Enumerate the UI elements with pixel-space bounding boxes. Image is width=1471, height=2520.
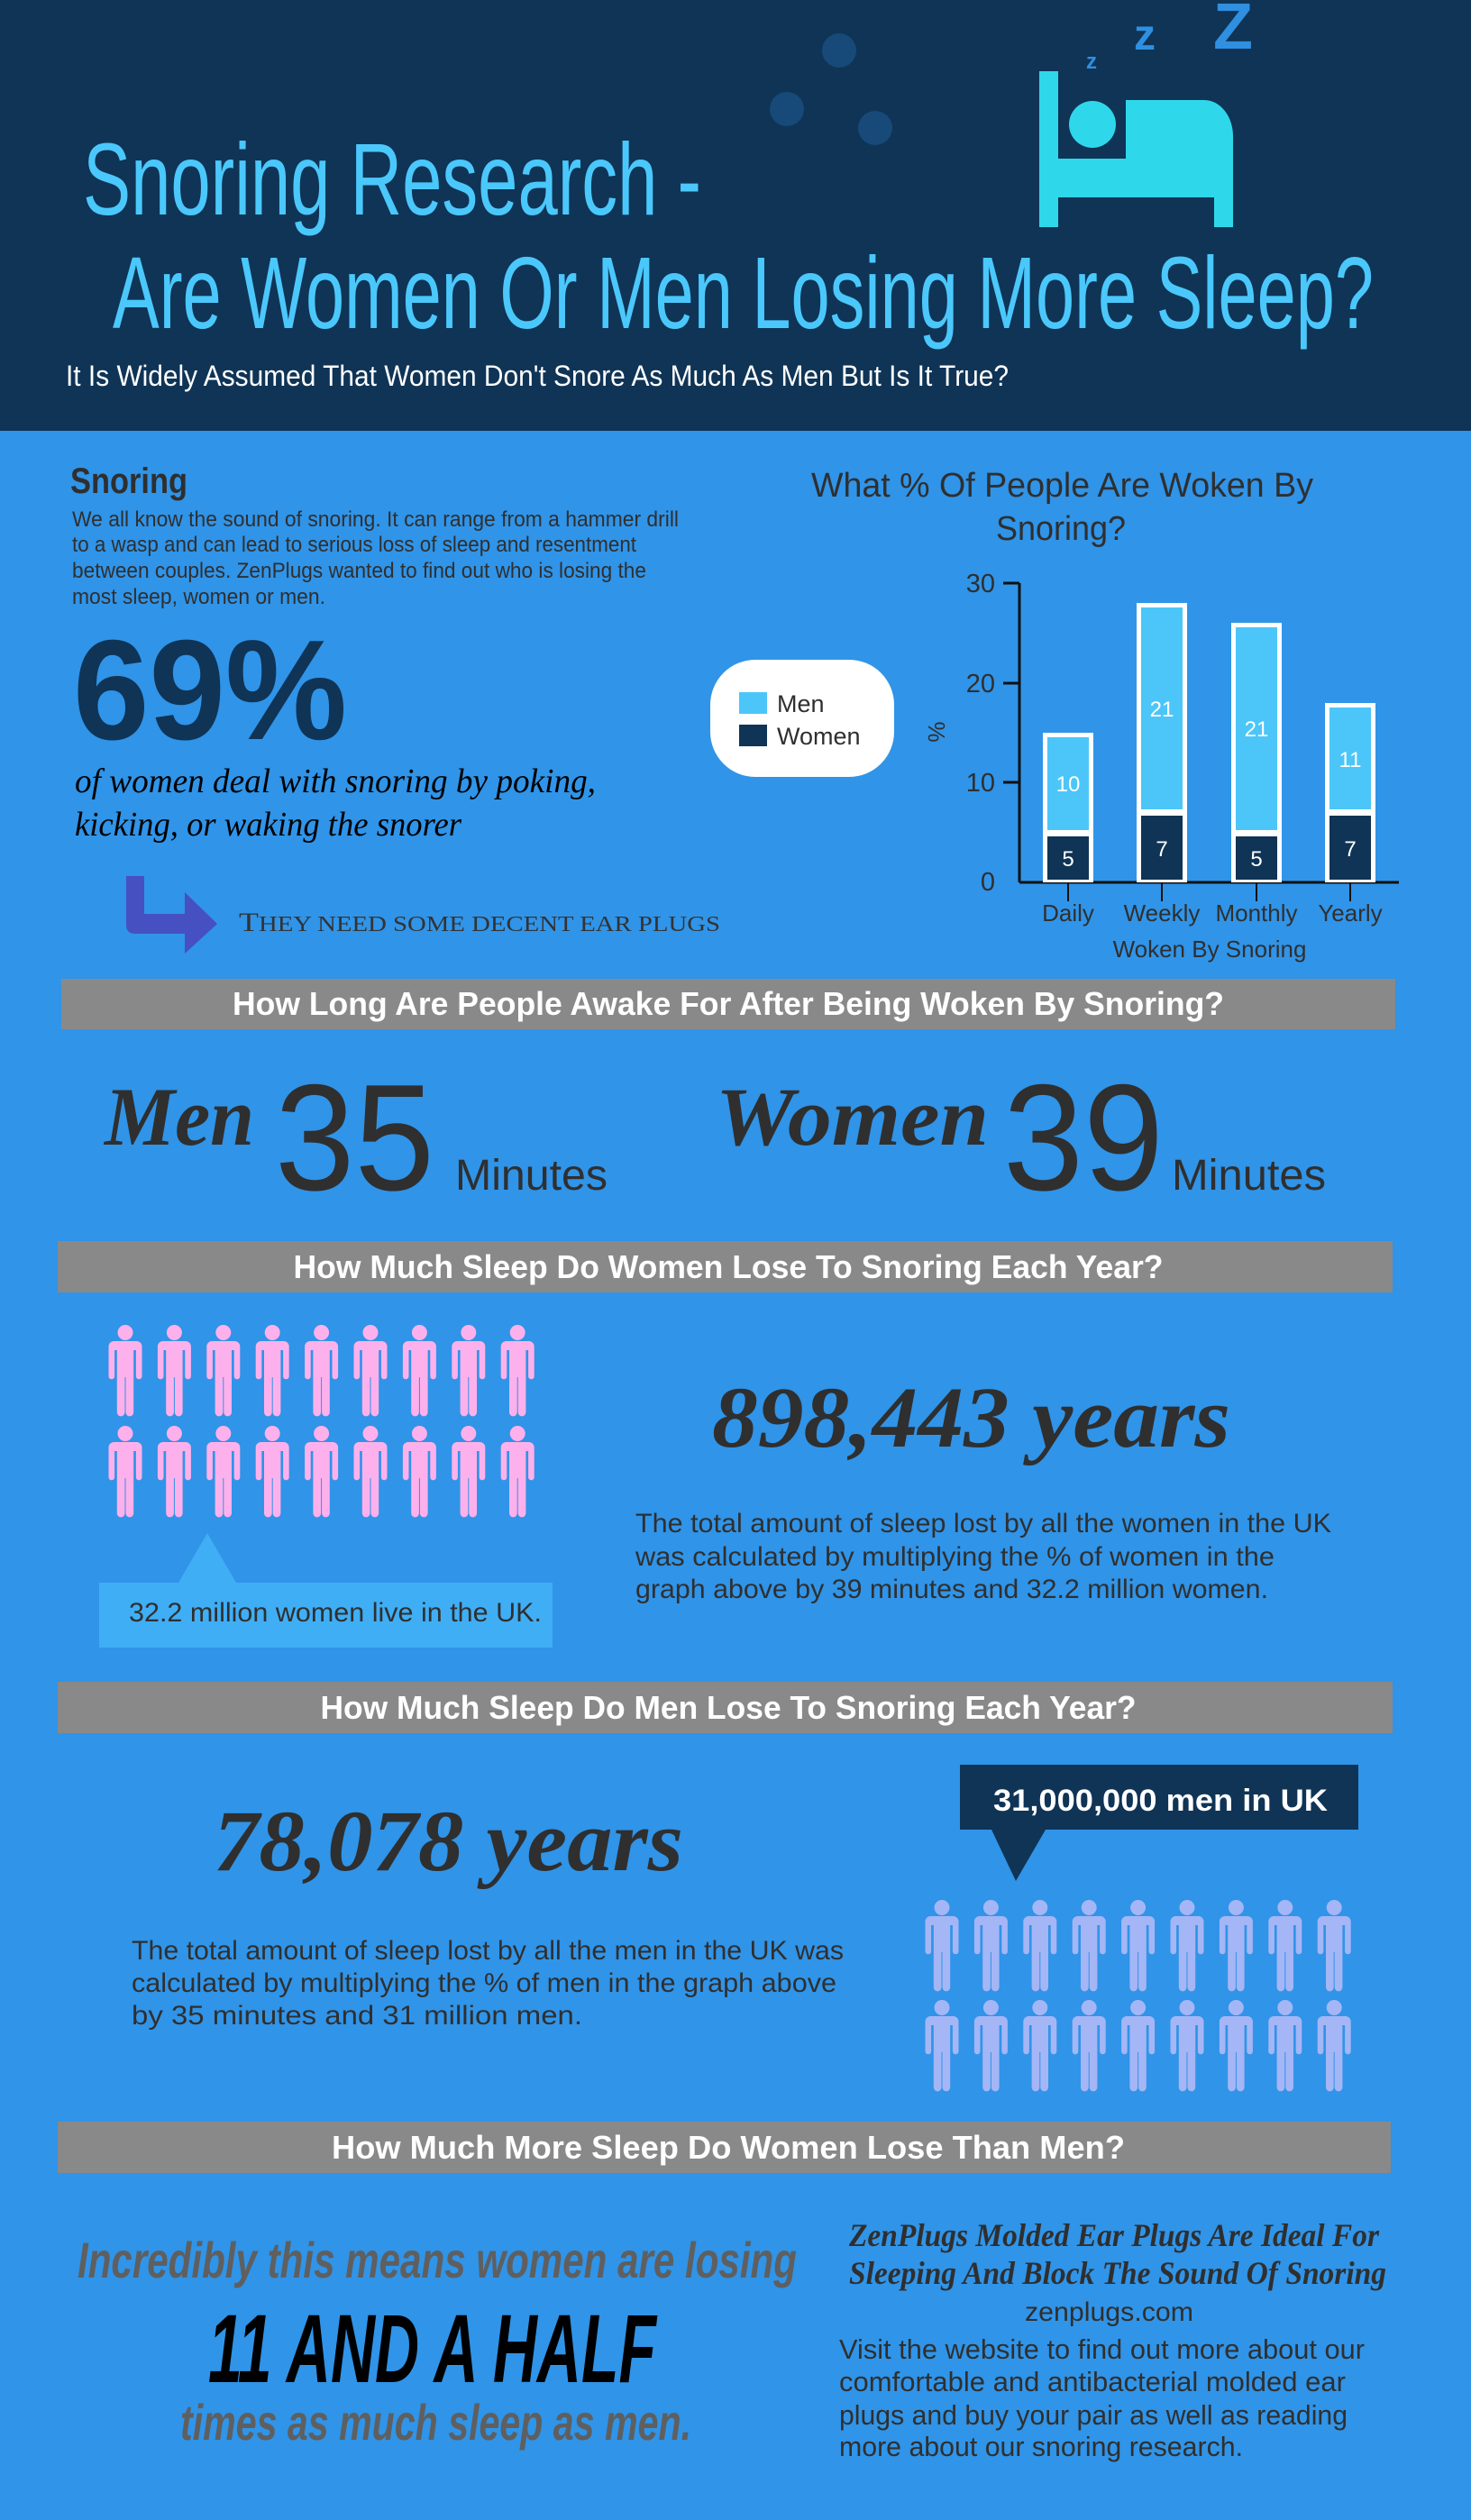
conclusion statement: Incredibly this means women are losing (78, 2232, 797, 2288)
decorative snore bubbles (770, 33, 892, 145)
bar chart: woken by snoring (710, 467, 1399, 963)
stat: men 35 minutes (103, 1053, 608, 1222)
header panel (0, 0, 1471, 431)
bars (1043, 603, 1375, 882)
heading bar: men sleep lost: How Much Sleep Do Men Lose To Snoring Each Year? (321, 1689, 1136, 1726)
bar chart: woken by snoring: % (923, 721, 950, 743)
heading bar: awake time: How Long Are People Awake For After Being Woken By Snoring? (233, 985, 1224, 1022)
heading bar: awake time (61, 979, 1395, 1029)
ear plugs note: THEY NEED SOME DECENT EAR PLUGS (239, 908, 720, 937)
bars: 21 (1150, 698, 1174, 722)
x labels: Weekly (1124, 899, 1200, 927)
men explanation: The total amount of sleep lost by all the men in the UK was (132, 1936, 844, 1966)
intro paragraph: most sleep, women or men. (72, 585, 325, 609)
x labels: Yearly (1318, 899, 1383, 927)
heading bar: comparison (58, 2122, 1391, 2173)
bars: 11 (1339, 748, 1361, 772)
stat: women 39 minutes: Minutes (1172, 1152, 1326, 1200)
x labels: Monthly (1215, 899, 1298, 927)
stat: men 35 minutes: 35 (275, 1053, 434, 1222)
intro paragraph: We all know the sound of snoring. It can range from a hammer drill (72, 507, 679, 532)
x labels (1042, 899, 1383, 963)
bars: 21 (1245, 717, 1268, 742)
stat caption (75, 762, 596, 844)
axes (1003, 583, 1399, 901)
callout: men population (960, 1765, 1358, 1881)
chart title: Snoring? (996, 510, 1126, 548)
bar chart: woken by snoring: 30 (966, 570, 995, 598)
stat: women years: 898,443 years (712, 1369, 1230, 1465)
stat: men years: 78,078 years (214, 1793, 683, 1889)
icon grid: women (108, 1325, 534, 1517)
callout: women population: 32.2 million women live in the UK. (129, 1598, 542, 1628)
women explanation: was calculated by multiplying the % of women in the (635, 1542, 1275, 1572)
heading bar: women sleep lost (58, 1241, 1393, 1292)
promo: zenplugs: more about our snoring research. (839, 2431, 1243, 2462)
legend: Women (777, 723, 861, 750)
icon: sleeping in bed (1039, 71, 1233, 227)
icon: zzz: z (1086, 50, 1097, 74)
legend: Men (777, 690, 825, 717)
stat: women 39 minutes: 39 (1003, 1053, 1164, 1222)
men explanation: by 35 minutes and 31 million men. (132, 2001, 582, 2031)
intro paragraph: to a wasp and can lead to serious loss of sleep and resentment (72, 533, 636, 557)
icon: zzz: z (1134, 12, 1156, 59)
icon grid: men (925, 1900, 1351, 2091)
conclusion statement: 11 AND A HALF (208, 2294, 658, 2403)
promo: zenplugs: zenplugs.com (1025, 2297, 1193, 2327)
women explanation: The total amount of sleep lost by all the women in the UK (635, 1509, 1331, 1538)
women explanation (635, 1509, 1331, 1604)
chart title (811, 467, 1313, 548)
stat: women 39 minutes: Women (716, 1071, 989, 1163)
bar chart: woken by snoring: 0 (981, 868, 995, 897)
heading bar: comparison: How Much More Sleep Do Women Lose Than Men? (332, 2129, 1125, 2166)
x labels: Woken By Snoring (1113, 936, 1306, 963)
stat: women 39 minutes (716, 1053, 1326, 1222)
stat caption: of women deal with snoring by poking, (75, 762, 596, 800)
callout: women population (99, 1533, 553, 1648)
heading: Snoring: Snoring (70, 461, 187, 501)
promo: zenplugs: comfortable and antibacterial molded ear (839, 2366, 1346, 2397)
bars: 5 (1250, 847, 1263, 872)
bars: 10 (1056, 772, 1080, 797)
men explanation: calculated by multiplying the % of men in the graph above (132, 1968, 836, 1998)
intro paragraph (72, 507, 679, 609)
subtitle: It Is Widely Assumed That Women Don't Snore As Much As Men But Is It True? (66, 360, 1009, 392)
stat caption: kicking, or waking the snorer (75, 806, 461, 844)
promo: zenplugs (839, 2217, 1386, 2462)
icon: zzz (1086, 0, 1253, 74)
heading bar: women sleep lost: How Much Sleep Do Women Lose To Snoring Each Year? (294, 1248, 1163, 1285)
title: Snoring Research - (83, 123, 701, 236)
promo: zenplugs: ZenPlugs Molded Ear Plugs Are Ideal For (848, 2217, 1380, 2253)
legend (710, 660, 894, 777)
intro paragraph: between couples. ZenPlugs wanted to find out who is losing the (72, 559, 646, 583)
bar chart: woken by snoring: 10 (966, 769, 995, 798)
bars: 7 (1344, 837, 1357, 862)
promo: zenplugs: Sleeping And Block The Sound Of Snoring (849, 2255, 1386, 2291)
x labels: Daily (1042, 899, 1094, 927)
heading bar: men sleep lost (58, 1682, 1393, 1733)
stat: 69%: 69% (73, 611, 347, 770)
bars: 5 (1062, 847, 1074, 872)
women explanation: graph above by 39 minutes and 32.2 million women. (635, 1575, 1268, 1604)
promo: zenplugs: plugs and buy your pair as well as reading (839, 2399, 1348, 2431)
stat: men 35 minutes: Minutes (455, 1152, 608, 1200)
stat: men 35 minutes: Men (103, 1071, 254, 1163)
chart title: What % Of People Are Woken By (811, 467, 1313, 505)
arrow (126, 876, 217, 954)
men explanation (132, 1936, 844, 2031)
bar chart: woken by snoring: 20 (966, 670, 995, 698)
conclusion statement: times as much sleep as men. (180, 2394, 691, 2451)
bars: 7 (1156, 837, 1168, 862)
conclusion statement (78, 2232, 797, 2451)
panel: snoring intro (70, 461, 720, 954)
promo: zenplugs: Visit the website to find out more about our (839, 2333, 1365, 2365)
callout: men population: 31,000,000 men in UK (993, 1784, 1328, 1818)
title (83, 123, 1374, 350)
